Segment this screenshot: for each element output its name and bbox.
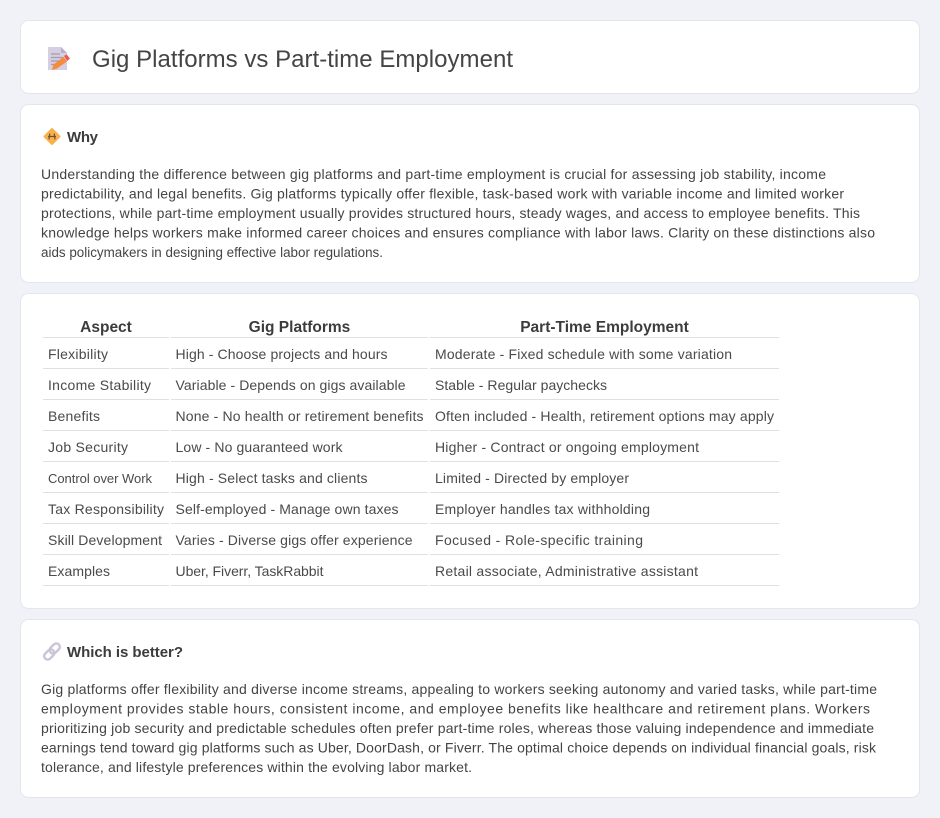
table row: control over work: [48, 470, 629, 486]
table header: Aspect: [80, 319, 132, 336]
panel: title header: [20, 20, 920, 94]
icon: chain link: [43, 642, 61, 661]
table header: Gig Platforms: [249, 319, 350, 336]
table row: benefits: None - No health or retirement benefits: [176, 408, 424, 424]
table row: skill development: Skill Development: [48, 532, 162, 548]
table row: examples: Retail associate, Administrative assistant: [435, 563, 698, 579]
table row: skill development: Varies - Diverse gigs offer experience: [176, 532, 413, 548]
text block: which is better paragraph: [41, 681, 877, 775]
panel: which is better: [20, 620, 920, 798]
text block: which is better paragraph: prioritizing job security and predictable schedules often prefer part-time roles, whereas those valuing independence and immediate: [41, 720, 874, 736]
table row: benefits: [48, 408, 774, 424]
text block: which is better paragraph: employment provides stable hours, consistent income, and employee benefits like healthcare and retirement plans. Workers: [41, 700, 870, 716]
text block: which is better paragraph: tolerance, and lifestyle preferences within the evolving labor market.: [41, 759, 472, 775]
table row: tax responsibility: Employer handles tax withholding: [435, 501, 650, 517]
table row: income stability: Variable - Depends on gigs available: [176, 377, 406, 393]
table row: job security: Low - No guaranteed work: [176, 439, 344, 455]
icon: memo with pencil: [48, 47, 70, 70]
table row: tax responsibility: Self-employed - Manage own taxes: [176, 501, 398, 517]
text block: why paragraph: Understanding the difference between gig platforms and part-time employment is crucial for assessing job stability, income: [41, 166, 826, 182]
table row: examples: Uber, Fiverr, TaskRabbit: [176, 563, 324, 579]
table row: job security: [48, 439, 699, 455]
panel: comparison table: [20, 294, 920, 608]
panel: why: [20, 104, 920, 282]
table row: benefits: Often included - Health, retirement options may apply: [435, 408, 774, 424]
table row: examples: [48, 563, 698, 579]
text block: why paragraph: protections, while part-time employment usually provides structured hours, steady wages, and access to employee benefits. This: [41, 205, 860, 221]
table row: control over work: Limited - Directed by employer: [435, 470, 629, 486]
table row: income stability: Income Stability: [48, 377, 151, 393]
table row: benefits: Benefits: [48, 408, 100, 424]
heading: why: Why: [67, 129, 99, 146]
text block: why paragraph: [41, 166, 875, 260]
table header: Part-Time Employment: [520, 319, 689, 336]
text block: why paragraph: predictability, and legal benefits. Gig platforms typically offer flexible, task-based work with variable income and limited worker: [41, 186, 844, 202]
table row: skill development: [48, 532, 643, 548]
table row: examples: Examples: [48, 563, 110, 579]
table row: control over work: High - Select tasks and clients: [176, 470, 368, 486]
text block: which is better paragraph: Gig platforms offer flexibility and diverse income streams, appealing to workers seeking autonomy and varied tasks, while part-time: [41, 681, 877, 697]
text block: which is better paragraph: earnings tend toward gig platforms such as Uber, DoorDash, or Fiverr. The optimal choice depends on individual financial goals, risk: [41, 740, 877, 756]
table row: income stability: Stable - Regular paychecks: [435, 377, 607, 393]
table row: job security: Job Security: [48, 439, 128, 455]
table row: flexibility: High - Choose projects and hours: [176, 346, 388, 362]
table row: flexibility: Moderate - Fixed schedule with some variation: [435, 346, 732, 362]
heading: which is better: Which is better?: [67, 644, 183, 661]
table row: tax responsibility: [48, 501, 650, 517]
table row: flexibility: [48, 346, 732, 362]
table row: tax responsibility: Tax Responsibility: [48, 501, 164, 517]
table header: [80, 319, 689, 336]
text block: why paragraph: aids policymakers in designing effective labor regulations.: [41, 245, 383, 260]
table row: control over work: Control over Work: [48, 471, 152, 486]
title: Gig Platforms vs Part-time Employment: [92, 46, 513, 73]
table row: income stability: [48, 377, 607, 393]
table row: job security: Higher - Contract or ongoing employment: [435, 439, 699, 455]
table row: skill development: Focused - Role-specific training: [435, 532, 643, 548]
table row: flexibility: Flexibility: [48, 346, 108, 362]
icon: diamond warning sign: [44, 129, 60, 144]
text block: why paragraph: knowledge helps workers make informed career choices and ensures compliance with labor laws. Clarity on these distinctions also: [41, 224, 875, 240]
